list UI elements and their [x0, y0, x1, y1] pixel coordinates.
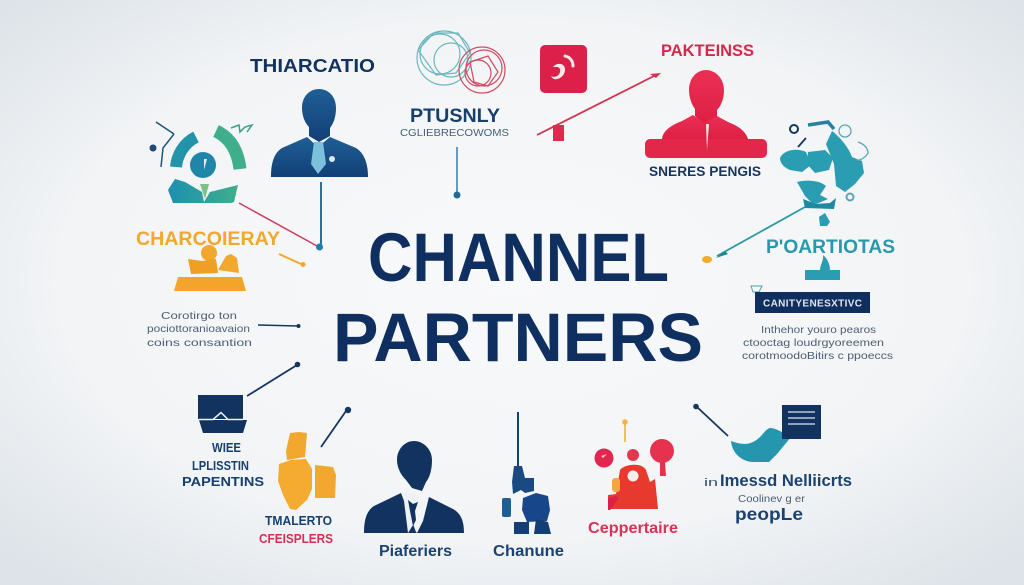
red connector to hub [239, 203, 317, 246]
bottom chess-piece icon with vertical line: Chanune [493, 543, 564, 560]
icon: teal hand with document and label: peopLe [735, 504, 803, 524]
connector to document icon [693, 404, 728, 436]
icon: teal map with network [780, 122, 868, 226]
bottom navy person node [364, 441, 464, 560]
icon: navy laptop with label [182, 395, 264, 489]
left orange heading and icon [136, 229, 280, 291]
connector to thumb icon [321, 407, 351, 447]
main title [333, 219, 703, 376]
right block: teal heading, navy banner and description: ctooctag loudrgyoreemen [743, 337, 884, 349]
top-left person node: THIARCATIO [250, 56, 375, 76]
left connector line [258, 324, 300, 328]
icon: orange thumbs up with label [259, 432, 336, 546]
bottom navy person node: Piaferiers [379, 543, 452, 560]
red arrow [537, 73, 661, 141]
top-center circles and label: CGLIEBRECOWOMS [400, 128, 509, 139]
icon: red app square [540, 45, 587, 93]
icon: orange thumbs up with label: CFEISPLERS [259, 531, 333, 546]
icon: navy laptop with label: LPLISSTIN [192, 459, 249, 473]
icon: teal hand with document and label [704, 405, 852, 524]
right block: teal heading, navy banner and description [742, 237, 895, 362]
main title: PARTNERS [333, 299, 703, 376]
icon: orange thumbs up with label: TMALERTO [265, 514, 332, 528]
left description text: Corotirgo ton [161, 310, 237, 322]
left description text: coins consantion [147, 337, 252, 349]
icon: teal hand with document and label: Imessd Nelliicrts [720, 472, 852, 490]
top-right red person node: PAKTEINSS [661, 41, 754, 60]
top-right red person node [645, 41, 767, 179]
icon: navy laptop with label: WIEE [212, 441, 241, 455]
icon: teal and green arc figure [150, 122, 252, 203]
icon: teal hand with document and label: in [704, 477, 718, 489]
bottom red group icon: Ceppertaire [588, 520, 678, 537]
top-right red person node: SNERES PENGIS [649, 164, 761, 179]
left description text [147, 310, 252, 349]
top-center circles and label: PTUSNLY [410, 106, 500, 127]
left orange heading and icon: CHARCOIERAY [136, 229, 280, 250]
bottom chess-piece icon with vertical line [493, 412, 564, 560]
top-left person node [250, 56, 375, 250]
right block: teal heading, navy banner and description: CANITYENESXTIVC [763, 298, 862, 310]
diagonal connector to laptop [247, 362, 300, 396]
icon: navy laptop with label: PAPENTINS [182, 474, 264, 489]
bottom red group icon [588, 419, 678, 537]
main title: CHANNEL [368, 219, 669, 296]
teal pointer with yellow tip [702, 207, 805, 263]
top-center circles and label [400, 31, 509, 198]
right block: teal heading, navy banner and description: Inthehor youro pearos [761, 324, 876, 336]
icon: teal hand with document and label: Coolinev g er [738, 494, 806, 505]
right block: teal heading, navy banner and description: P'OARTIOTAS [766, 237, 895, 258]
small orange pointer [279, 254, 306, 267]
left description text: pociottoranioavaion [147, 323, 250, 335]
right block: teal heading, navy banner and description: corotmoodoBitirs c ppoeccs [742, 350, 893, 362]
